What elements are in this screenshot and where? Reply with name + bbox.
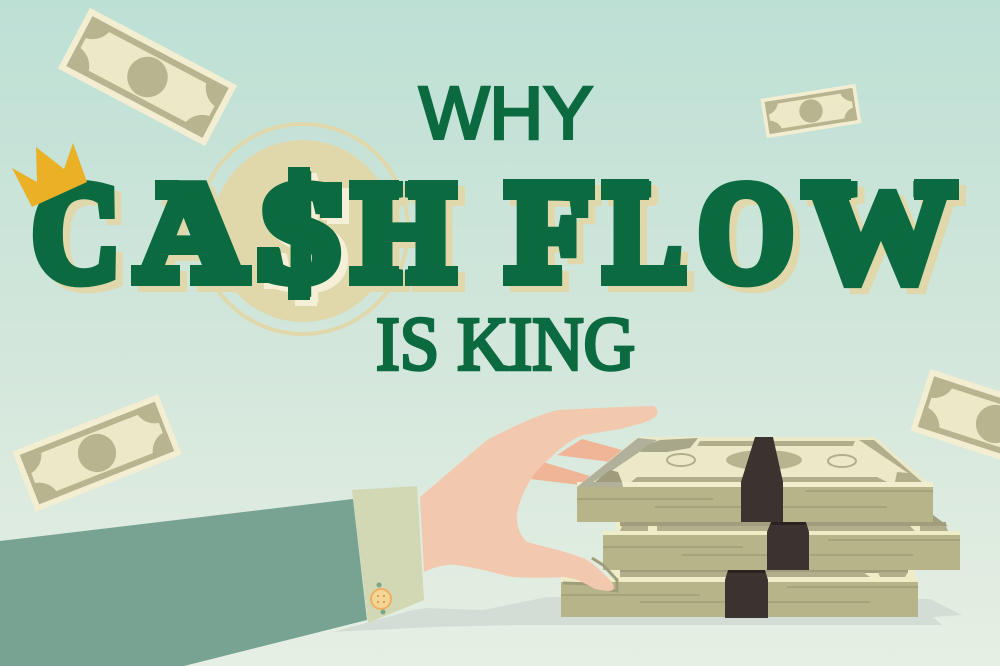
title shadow: cash flow: $ bbox=[269, 159, 346, 317]
title shadow: cash flow: O bbox=[705, 159, 801, 317]
title shadow: cash flow: L bbox=[614, 159, 688, 317]
title: why: WHY bbox=[419, 72, 593, 154]
title shadow: cash flow: F bbox=[516, 159, 596, 317]
hand: back fingers bbox=[530, 439, 622, 485]
title: cash flow: O bbox=[698, 153, 794, 311]
sleeve bbox=[0, 499, 367, 666]
stack: bottom bbox=[561, 570, 918, 618]
hand bbox=[420, 406, 657, 591]
bill: right edge bbox=[910, 369, 1000, 479]
money stacks bbox=[530, 437, 960, 618]
title shadow: cash flow: H bbox=[362, 159, 460, 317]
title: cash flow: W bbox=[806, 153, 953, 311]
bill: top left bbox=[58, 8, 237, 146]
stack: top bbox=[577, 437, 933, 522]
title shadow: cash flow: W bbox=[813, 159, 960, 317]
bill: lower left bbox=[12, 394, 182, 512]
title: cash flow: H bbox=[355, 153, 453, 311]
icon: crown bbox=[12, 143, 87, 207]
title: cash flow: C bbox=[32, 153, 120, 311]
arm and hand bbox=[0, 406, 657, 666]
title: cash flow: F bbox=[509, 153, 589, 311]
title shadow: cash flow bbox=[39, 159, 966, 317]
title: cash flow: $ bbox=[262, 153, 339, 311]
icon: cuff button bbox=[371, 582, 391, 614]
title shadow: cash flow: C bbox=[39, 159, 127, 317]
cuff bbox=[352, 486, 424, 623]
title: cash flow: A bbox=[136, 153, 246, 311]
title: cash flow bbox=[32, 153, 959, 311]
stack: middle bbox=[603, 515, 960, 570]
floor shadow bbox=[333, 597, 962, 632]
bill: top right bbox=[760, 84, 862, 138]
title: cash flow: L bbox=[607, 153, 681, 311]
title shadow: cash flow: A bbox=[143, 159, 253, 317]
title: is king: IS KING bbox=[376, 302, 635, 386]
coin backdrop bbox=[198, 124, 408, 334]
